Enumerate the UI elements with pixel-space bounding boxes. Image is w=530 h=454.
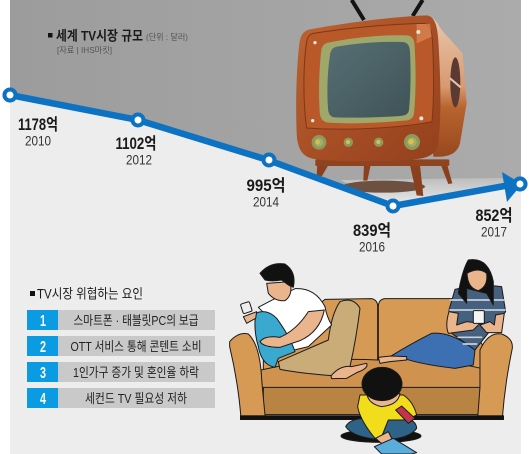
shirt	[358, 395, 417, 438]
factor 4: 세컨드 TV 필요성 저하	[85, 391, 187, 406]
phone	[473, 311, 484, 323]
side panel	[427, 16, 467, 157]
factor 3	[27, 362, 215, 382]
label 2012	[116, 134, 156, 168]
side speaker	[450, 57, 461, 107]
shadow	[341, 430, 421, 442]
striped top	[449, 285, 506, 350]
hand	[376, 432, 395, 447]
heading: threats: TV시장 위협하는 요인	[37, 286, 143, 302]
factor 3: 3	[40, 365, 46, 382]
front body	[296, 15, 440, 161]
head	[367, 393, 400, 407]
floor shadow	[342, 181, 425, 193]
label 2010: 2010	[25, 132, 51, 148]
label 2010: 1178억	[18, 115, 58, 134]
label 2016	[353, 221, 391, 254]
feet	[331, 363, 367, 379]
list: threat factors	[27, 310, 215, 408]
label 2016: 2016	[359, 238, 385, 254]
trousers	[278, 300, 360, 376]
label 2012: 1102억	[116, 134, 156, 153]
screen bezel	[319, 35, 416, 123]
label 2012: 2012	[126, 152, 152, 168]
data points	[4, 90, 526, 212]
factor 1: 1	[40, 313, 46, 330]
chart title	[48, 28, 188, 55]
illustration: family on sofa	[230, 260, 512, 454]
factor 2: OTT 서비스 통해 콘텐트 소비	[70, 339, 202, 354]
factor 4	[27, 388, 215, 408]
factor 1: 스마트폰 · 태블릿PC의 보급	[74, 313, 199, 328]
knobs	[312, 134, 420, 150]
tablet	[374, 438, 417, 454]
factor 3: 1인가구 증가 및 혼인율 하락	[73, 365, 199, 380]
label 2010	[18, 115, 58, 148]
screws	[311, 30, 423, 122]
chart title: 세계 TV시장 규모	[56, 28, 143, 44]
head	[267, 282, 291, 301]
jeans	[390, 333, 475, 368]
woman	[378, 260, 506, 368]
label 2014: 995억	[246, 176, 286, 195]
label 2014: 2014	[253, 194, 279, 210]
label 2017: 852억	[476, 206, 512, 225]
hair	[458, 260, 493, 305]
line chart	[4, 90, 526, 212]
factor 2	[27, 336, 215, 356]
sofa	[230, 299, 512, 418]
label 2017: 2017	[481, 224, 507, 240]
snack	[396, 406, 415, 423]
chart title: (단위 : 달러)	[146, 32, 188, 42]
legs	[317, 163, 452, 196]
arms	[447, 312, 480, 333]
end data point over margin	[4, 90, 526, 190]
child	[341, 367, 421, 454]
factor 4: 4	[40, 391, 46, 408]
chart title: [자료 | IHS마킷]	[57, 45, 112, 55]
arrow head	[502, 172, 522, 202]
label 2016: 839억	[353, 221, 391, 240]
hand and phone	[243, 312, 257, 323]
antennas	[352, 0, 423, 20]
label 2014	[246, 176, 286, 210]
cushion	[255, 312, 295, 367]
factor 2: 2	[40, 339, 46, 356]
man	[240, 264, 367, 379]
wood highlight	[417, 24, 432, 43]
face	[467, 270, 487, 291]
icon: retro TV	[296, 0, 467, 196]
foot	[378, 356, 407, 363]
label 2017	[476, 206, 512, 240]
screen	[327, 42, 411, 118]
data labels	[18, 115, 512, 254]
side margins	[0, 0, 530, 175]
legs	[346, 417, 417, 440]
factor 1	[27, 310, 215, 330]
front inner frame	[304, 23, 434, 129]
shirt	[258, 289, 332, 351]
arm	[260, 310, 324, 347]
